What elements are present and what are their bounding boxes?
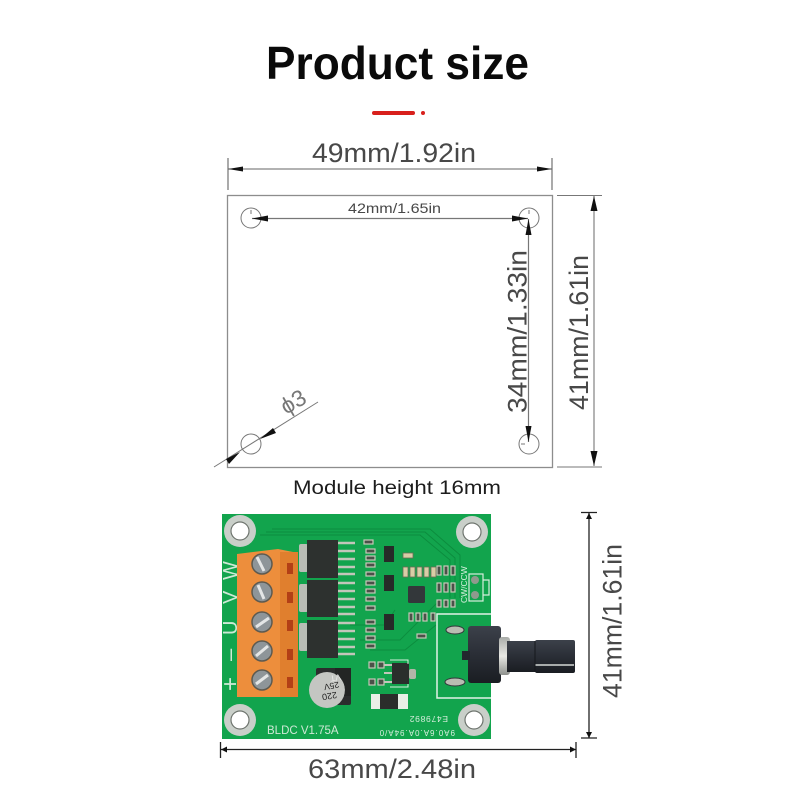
hole spacing dimension 34mm bbox=[502, 219, 532, 442]
product photo: BLDC controller board bbox=[217, 514, 575, 739]
diagram: mounting hole outline bbox=[214, 138, 602, 468]
silkscreen terminal labels: V bbox=[220, 590, 242, 604]
controller chip bbox=[408, 586, 425, 603]
silkscreen terminal labels: + bbox=[217, 677, 244, 691]
MOSFET bodies bbox=[307, 540, 338, 658]
voltage regulator bbox=[384, 660, 416, 687]
corner mounting holes bbox=[231, 522, 483, 729]
hole diameter callout: ϕ3 bbox=[276, 384, 311, 419]
beige capacitors bbox=[403, 553, 436, 577]
hole diameter callout bbox=[214, 384, 318, 467]
silkscreen terminal labels: W bbox=[220, 561, 242, 580]
pcb silkscreen text: BLDC V1.75A bbox=[267, 725, 339, 737]
MOSFET leads bbox=[338, 543, 355, 654]
pcb silkscreen text: E479892 bbox=[409, 714, 448, 724]
driver transistors bbox=[384, 546, 394, 630]
potentiometer solder pins bbox=[445, 626, 465, 686]
electrolytic capacitor: 25V bbox=[323, 680, 340, 692]
photo height dimension 41mm bbox=[581, 512, 628, 738]
title: Product size bbox=[266, 37, 529, 89]
silkscreen terminal labels: – bbox=[217, 648, 242, 661]
electrolytic capacitor: 220 bbox=[321, 690, 338, 702]
hole spacing dimension 42mm: 42mm/1.65in bbox=[348, 200, 441, 216]
height dimension 41mm bbox=[557, 196, 602, 467]
MOSFET tabs bbox=[299, 544, 308, 651]
direction header CW/CCW: CW/CCW bbox=[459, 566, 469, 603]
diode bbox=[371, 694, 408, 709]
height dimension 41mm: 41mm/1.61in bbox=[564, 255, 594, 410]
pcb traces bbox=[260, 529, 460, 650]
potentiometer silk outline bbox=[437, 614, 491, 698]
photo height dimension 41mm: 41mm/1.61in bbox=[598, 544, 628, 698]
pcb bbox=[222, 514, 491, 739]
silkscreen terminal labels bbox=[217, 561, 244, 691]
corner mounting pads bbox=[224, 515, 490, 736]
direction header CW/CCW bbox=[459, 566, 489, 603]
silkscreen terminal labels: U bbox=[220, 621, 242, 635]
pcb silkscreen text: 9A0.6A.0A.94A/0 bbox=[379, 728, 455, 737]
electrolytic capacitor: VT bbox=[329, 672, 342, 684]
board outline bbox=[228, 196, 552, 468]
width dimension 49mm bbox=[228, 138, 552, 190]
hole spacing dimension 42mm bbox=[252, 200, 528, 222]
hole spacing dimension 34mm: 34mm/1.33in bbox=[502, 250, 532, 413]
photo width dimension 63mm bbox=[220, 742, 576, 784]
potentiometer knob bbox=[462, 626, 575, 683]
small SMD resistors bbox=[364, 540, 455, 685]
orange terminal block bbox=[237, 549, 298, 697]
pcb silkscreen text bbox=[267, 714, 455, 737]
width dimension 49mm: 49mm/1.92in bbox=[312, 138, 476, 168]
title accent: red dash and dot bbox=[372, 111, 425, 115]
photo width dimension 63mm: 63mm/2.48in bbox=[308, 754, 476, 784]
mounting holes bbox=[241, 208, 539, 454]
module height note: Module height 16mm bbox=[293, 477, 501, 499]
electrolytic capacitor bbox=[309, 668, 351, 708]
